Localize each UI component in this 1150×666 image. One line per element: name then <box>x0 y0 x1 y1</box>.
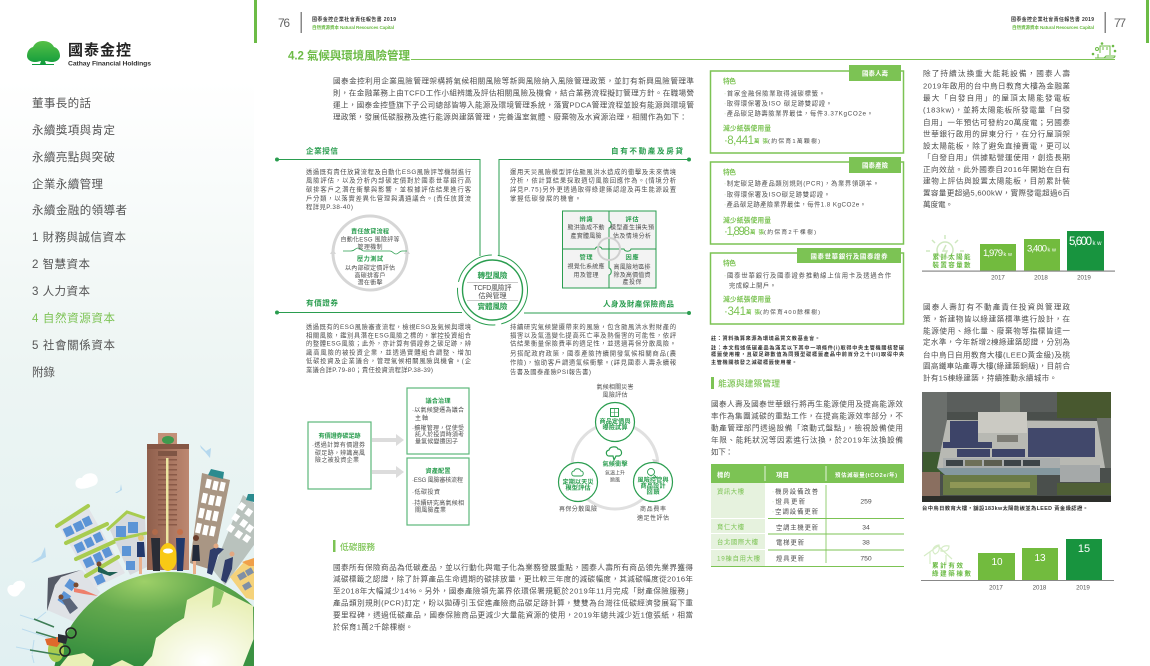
text: green building paragraph: 園高鐵車站產專大樓(綠建築銅級)，目前合 <box>923 360 1070 370</box>
table: equipment replacement <box>711 464 904 566</box>
panel: Cathay Century: ·制定碳足跡產品類別規則(PCR)，為業界領頭羊。 <box>724 178 879 188</box>
text: solar paragraph: 置容量更超過5,600kW，實際發電超過6百 <box>923 188 1070 198</box>
box: asset allocation <box>407 458 469 525</box>
text: solar paragraph: 2019年啟用的台中烏日教育大樓為金融業 <box>923 80 1070 90</box>
heading: life and property insurance: 人身及財產保險商品 <box>603 298 674 308</box>
text: low carbon service: 國泰所有保險商品為低碳產品，並以行動化與電子化為業務發展重點，國泰人壽所有商品領先業界獲得 <box>333 562 693 572</box>
footnotes: 標籤使用權，且碳足跡數值為同類型碳標籤產品中前百分之十(ii)取得中央 <box>711 351 904 358</box>
text: securities: 的整體ESG風險；此外，亦計算有價證券之碳足跡，辨 <box>306 338 472 348</box>
puzzle diagram: 模型產生損失預 <box>610 224 654 232</box>
tower <box>147 433 189 570</box>
cycle diagram: climate impact: 風險評估 <box>602 391 628 399</box>
text: corporate lending: 戶分類，以落實差異化管理與溝通議合。(責任放貸流 <box>306 194 472 202</box>
section: low carbon service heading <box>333 540 375 552</box>
panel: Cathay Century: ·取得環保署及ISO碳足跡雙認證。 <box>724 190 830 198</box>
text: green building paragraph: 台中烏日自用教育大樓(LEED黃金級)及桃 <box>923 350 1070 360</box>
panel: Cathay United Bank and Securities: 特色 <box>723 258 736 268</box>
center circle: transition and physical risk: 估與管理 <box>478 291 506 300</box>
node: pricing <box>596 402 634 442</box>
circular diagram: responsible lending and stress test: 高碳排客戶 <box>354 272 386 280</box>
table: equipment replacement: 資訊大樓 <box>717 486 745 496</box>
table: equipment replacement: 19棟自用大樓 <box>717 554 761 562</box>
box: stewardship: 量氣候變遷因子 <box>415 438 458 446</box>
cycle diagram: climate impact: 再保分散風險 <box>559 505 597 513</box>
cycle diagram: climate impact: 商品費率 <box>640 505 666 513</box>
text: real estate: 掌握低碳發展的機會。 <box>510 194 581 202</box>
panel: Cathay United Bank and Securities: 萬張 <box>746 308 760 316</box>
text: solar paragraph: 建物上評估與設置太陽能板，目前累計裝 <box>923 176 1070 186</box>
center circle: transition and physical risk: 轉型風險 <box>478 270 508 280</box>
bar chart: cumulative green buildings: 15 <box>1078 543 1090 555</box>
footnotes: 註：資料換算來源為環境品質文教基金會。 <box>711 335 820 342</box>
logo: Cathay Financial Holdings: 國泰金控 <box>68 41 131 59</box>
bar chart: cumulative green buildings: 10 <box>991 557 1003 568</box>
box: asset allocation: 關風險產業 <box>415 506 446 514</box>
heading: real estate and mortgage: 自有不動產及房貸 <box>611 146 683 156</box>
box: securities footprint: 碳足跡，辨識高風 <box>315 449 365 457</box>
navigation menu: 4 自然資源資本 <box>32 311 116 325</box>
puzzle diagram: 視覺化系統應 <box>568 262 604 270</box>
table: equipment replacement: ·空調設備更新 <box>772 506 819 516</box>
flow diagram: securities carbon footprint <box>308 388 469 525</box>
page header right: 國泰金控企業社會責任報告書 2019 <box>1011 16 1094 23</box>
center circle: transition and physical risk <box>458 255 528 325</box>
text: solar paragraph: 「自發自用」供據點營運使用，創造長期 <box>923 152 1070 162</box>
puzzle diagram: 颱洪造成不動 <box>568 224 604 232</box>
panel: Cathay United Bank and Securities: 完成線上開戶。 <box>729 280 776 290</box>
bar chart: cumulative green buildings: 13 <box>1034 553 1046 564</box>
table: equipment replacement: 預估減碳量(tCO2e/年) <box>835 471 897 479</box>
bar chart: cumulative green buildings: 2017 <box>989 584 1003 592</box>
text: insurance products: 持續研究氣候變遷帶來的風險，包含颱風洪水對財產的 <box>510 322 676 331</box>
text: real estate: 運用天災風險模型評估颱風洪水造成的衝擊及未來情境 <box>510 167 676 176</box>
page edge tab right <box>1146 0 1149 43</box>
page header left: 國泰金控企業社會責任報告書 2019 <box>312 16 396 23</box>
circular diagram: responsible lending and stress test: 責任放貸流程 <box>351 228 389 236</box>
page edge tab left <box>254 0 257 43</box>
text: corporate lending: 風險評估，以及分析內部碳定價對於國泰世華銀行高 <box>306 176 471 184</box>
footnotes: 註：本文指述低碳產品為滿足以下其中一項條件(i)取得中央主管機關核發碳 <box>711 344 904 352</box>
text: green building paragraph: 計有15棟綠建築，持續推動永續城市。 <box>923 372 1057 382</box>
text: solar paragraph: 自用」一年預估可發約20萬度電；另國泰 <box>923 117 1070 127</box>
box: stewardship: 託人於投資時須考 <box>415 430 464 438</box>
box: securities footprint: 有價證券碳足跡 <box>318 432 361 440</box>
text: green building paragraph <box>923 302 1070 382</box>
text: solar paragraph: 除了持續汰換重大能耗設備，國泰人壽 <box>923 68 1070 78</box>
cycle diagram: climate impact <box>558 383 672 522</box>
node: risk control: 商品設計 <box>640 482 666 490</box>
intro paragraph <box>333 76 694 122</box>
box: securities footprint: ·透過計算有價證券 <box>312 441 365 449</box>
photo detail: roof and solar arrays <box>937 412 1105 482</box>
table: equipment replacement: ·機房設備改善 <box>772 486 818 496</box>
panel: Cathay United Bank and Securities: ·341 <box>724 306 746 318</box>
navigation menu: 3 人力資本 <box>32 284 90 298</box>
text: energy paragraph: 國泰人壽及國泰世華銀行將再生能源使用及提高能源效 <box>711 398 903 408</box>
navigation menu: 企業永續管理 <box>32 177 104 191</box>
bar chart: cumulative solar capacity <box>922 231 1115 282</box>
text: green building paragraph: 策，新建物皆以綠建築標準進行設計，在 <box>923 314 1070 324</box>
box: asset allocation: ·低碳投資 <box>412 488 440 496</box>
panel: Cathay United Bank and Securities: (約保育400餘棵樹) <box>760 308 820 316</box>
bar chart: cumulative green buildings: 綠建築棟數 <box>932 568 972 578</box>
center circle: transition and physical risk: TCFD風險評 <box>474 283 512 292</box>
puzzle diagram: 產投保 <box>622 278 642 286</box>
node: disaster modelling <box>558 462 598 502</box>
intro paragraph: 國泰金控利用企業風險管理架構將氣候相關風險等新興風險納入風險管理政策，並訂有新興風險管理準 <box>333 76 694 86</box>
panel: Cathay Century: 國泰產險 <box>862 160 889 170</box>
text: green building paragraph: 定水準，今年新增2棟綠建築認證，分別為 <box>923 336 1070 346</box>
small green-roof house <box>107 512 147 575</box>
bar chart: cumulative solar capacity: 2018 <box>1034 274 1048 282</box>
bar chart: cumulative solar capacity: kw <box>1092 241 1102 247</box>
table: equipment replacement: 電梯更新 <box>776 538 805 546</box>
diagram frame lines <box>276 158 690 314</box>
center: climate impact <box>602 447 628 484</box>
puzzle diagram: 估及情境分析 <box>613 232 651 240</box>
text: securities <box>306 322 472 374</box>
panel: Cathay United Bank and Securities: 減少紙張使用量 <box>723 294 771 304</box>
cyclists and bushes <box>30 619 76 662</box>
text: solar paragraph <box>923 68 1070 209</box>
text: corporate lending <box>306 167 472 211</box>
page header right <box>1011 12 1126 33</box>
navigation menu: 永續亮點與突破 <box>32 150 116 164</box>
page header left: 76 <box>278 16 290 30</box>
navigation menu: 2 智慧資本 <box>32 257 90 271</box>
panel: Cathay United Bank and Securities <box>710 248 904 324</box>
text: securities: 識高風險的被投資企業，並透過實體組合調整、增加 <box>306 348 471 356</box>
panel: Cathay Life: (約保育1萬顆樹) <box>768 137 820 145</box>
text: energy paragraph: 動產管理部門透過設備「滾動式盤點」，檢視設備使用 <box>711 422 903 432</box>
text: securities: 透過既有的ESG風險審查流程，檢視ESG及氣候與環境 <box>306 322 471 331</box>
panel: Cathay United Bank and Securities: 國泰世華銀行及國泰證券 <box>810 252 888 260</box>
box: asset allocation: ·持續研究高氣候相 <box>412 499 464 507</box>
text: green building paragraph: 能源使用、綠化量、廢棄物等指標皆達一 <box>923 326 1070 336</box>
text: low carbon service: 要里程碑，透過低碳產品，國泰保險商品更減少大量能資源的使用，2019年總共減少近1億張紙，相當 <box>333 610 693 620</box>
clouds and birds <box>7 445 211 597</box>
illustration: green earth with city <box>7 433 254 666</box>
text: solar paragraph: 萬度電。 <box>923 199 953 209</box>
puzzle diagram: 高風險地區排 <box>614 263 650 271</box>
panel: Cathay Century <box>710 157 904 244</box>
center: climate impact: 氣溫上升 <box>605 470 625 476</box>
heading: securities: 有價證券 <box>306 298 338 308</box>
bar chart: cumulative solar capacity: 1,979 <box>983 248 1003 259</box>
circular diagram: responsible lending and stress test: 潛在衝擊 <box>358 278 382 286</box>
navigation menu: 5 社會關係資本 <box>32 338 116 352</box>
panel: Cathay Life: ·取得環保署及ISO 碳足跡雙認證。 <box>724 98 832 108</box>
table: equipment replacement: 空調主機更新 <box>776 522 819 532</box>
node: disaster modelling: 定期以天災 <box>562 478 594 486</box>
text: energy paragraph: 如下： <box>711 446 733 456</box>
table: equipment replacement: 項目 <box>776 471 789 479</box>
puzzle diagram <box>562 211 656 288</box>
text: corporate lending: 程詳見P.38-40) <box>306 202 353 211</box>
box: stewardship: 主軸 <box>415 414 428 422</box>
node: pricing: 商品定價與 <box>600 418 630 426</box>
center: climate impact: 颱風 <box>610 476 620 484</box>
table: equipment replacement: 34 <box>862 524 870 532</box>
center: climate impact: 氣候衝擊 <box>602 460 628 468</box>
navigation menu: 董事長的話 <box>32 96 92 110</box>
panel: Cathay Century: 萬張 <box>750 228 764 236</box>
panel: Cathay Life: ·8,441 <box>724 135 754 147</box>
logo: Cathay Financial Holdings: Cathay Financial Holdings <box>68 60 151 68</box>
bar chart: cumulative solar capacity: 2019 <box>1077 274 1091 282</box>
panel: Cathay Life: 特色 <box>723 76 736 86</box>
text: insurance products: 另搭配政府政策，國泰產險持續開發氣候相關商品(農 <box>510 348 677 358</box>
text: low carbon service: 於保育1萬2千餘棵樹。 <box>333 622 413 632</box>
bar chart: cumulative green buildings <box>921 539 1114 592</box>
bar chart: cumulative green buildings: 累計有效 <box>932 560 964 570</box>
circular diagram: responsible lending and stress test: 管理機制 <box>358 243 382 251</box>
table: equipment replacement: 台北國際大樓 <box>717 537 759 546</box>
box: stewardship: 議合治理 <box>426 397 451 405</box>
circular diagram: responsible lending and stress test: 以內部碳定價評估 <box>345 264 395 272</box>
section: low carbon service heading: 低碳服務 <box>340 541 375 552</box>
icon: leaf house <box>924 545 952 564</box>
table: equipment replacement: 育仁大樓 <box>717 522 745 531</box>
gray house <box>47 570 100 623</box>
cycle diagram: climate impact: 適足性評估 <box>637 514 669 522</box>
cycle diagram: climate impact: 氣候相關災害 <box>596 383 634 391</box>
table: equipment replacement: 標的 <box>717 470 731 479</box>
page header right: 自然資源資本 Natural Resources Capital <box>1012 24 1094 31</box>
text: real estate <box>510 167 677 202</box>
globe <box>54 572 254 666</box>
text: solar paragraph: (183kw)，並將太陽能板所發電量「自發 <box>923 104 1070 114</box>
navigation menu <box>32 96 127 379</box>
bar chart: cumulative solar capacity: 5,600 <box>1069 236 1092 248</box>
green-roof apartment <box>57 506 125 588</box>
panel: Cathay United Bank and Securities: ·國泰世華銀行及國泰證券推動線上信用卡及透過合作 <box>724 270 892 280</box>
gray-green building <box>213 494 254 585</box>
text: securities: 相關風險，鑑別具潛在ESG風險之標的，掌控投資組合 <box>306 330 472 340</box>
text: energy paragraph: 年限、能耗狀況等因素進行汰換，於2019年汰換設備 <box>711 434 903 444</box>
text: securities: 業議合詳P.79-80；責任投資流程詳P.38-39) <box>306 365 433 374</box>
text: insurance products: 損害以及氣溫變化提高死亡率及熱傷害的可能性，依評 <box>510 330 677 340</box>
intro paragraph: 運上，國泰金控暨旗下子公司總部皆導入能源及環境管理系統，落實PDCA管理流程並設有能源與環境管 <box>333 100 694 110</box>
text: corporate lending: 碳排客戶之潛在衝擊與影響，並根據評估結果進行客 <box>306 184 472 194</box>
text: low carbon service: 至2018年大幅減少14%。另外，國泰產險領先業界依環保署規範於2019年11月完成「財產保險服務」 <box>333 586 693 596</box>
footnotes <box>711 335 904 366</box>
navigation menu: 永續金融的領導者 <box>32 203 127 217</box>
text: solar paragraph: 正向效益。此外國泰自2016年開始在自有 <box>923 164 1070 174</box>
text: low carbon service: 產品類別規則(PCR)訂定，盼以拋磚引玉促進產險商品碳足跡計算，雙雙為台灣往低碳經濟發展寫下重 <box>333 598 693 608</box>
puzzle diagram: 用及管理 <box>574 271 598 279</box>
node: risk control <box>634 462 672 502</box>
box: asset allocation: ·ESG 風險審核流程 <box>412 476 463 484</box>
text: insurance products <box>510 322 677 376</box>
panel: left sidebar <box>0 0 254 666</box>
text: real estate: 分析，依計算結果採取適切風險回應作為。(情境分析 <box>510 176 677 184</box>
intro paragraph: 理政策，發展低碳服務及進行能源與建築管理，完善溫室氣體、廢棄物及水資源治理，相關作為如下： <box>333 112 687 122</box>
circular diagram: responsible lending and stress test: 壓力測試 <box>357 255 384 263</box>
intro paragraph: 則，在金融業務上由TCFD工作小組辨識及評估相關風險及機會，結合業務流程擬訂管理方針。在職場營 <box>333 88 694 98</box>
table: equipment replacement: ·燈具更新 <box>772 496 806 506</box>
puzzle diagram: 產實體風險 <box>570 232 602 240</box>
panel: Cathay Life: ·產品碳足跡壽險業界最佳，每件3.37KgCO2e。 <box>724 108 873 118</box>
navigation menu: 永續獎項與肯定 <box>32 123 116 137</box>
box: asset allocation: 資產配置 <box>426 467 450 475</box>
panel: Cathay Life: ·首家金融保險業取得減碳標籤。 <box>724 88 825 98</box>
box: stewardship: ·以氣候變遷為議合 <box>412 406 464 414</box>
text: insurance products: 作險)，協助客戶調適氣候衝擊。(詳見國泰人壽永續報 <box>510 358 677 366</box>
box: securities footprint: 險之被投資企業 <box>315 456 359 464</box>
text: insurance products: 告書及國泰產險PSI報告書) <box>510 367 591 376</box>
bar chart: cumulative solar capacity: 2017 <box>991 274 1005 282</box>
navigation menu: 附錄 <box>32 365 56 379</box>
panel: Cathay Life <box>710 65 904 153</box>
bar chart: cumulative solar capacity: 累計太陽能 <box>932 252 971 261</box>
people and mascot <box>58 529 234 614</box>
icon: sun <box>926 235 964 258</box>
puzzle diagram: 除及高價值資 <box>614 271 650 279</box>
table: equipment replacement: 259 <box>860 498 872 506</box>
bar chart: cumulative solar capacity: kw <box>1048 248 1056 254</box>
text: green building paragraph: 國泰人壽訂有不動產責任投資與管理政 <box>923 302 1070 312</box>
text: energy paragraph <box>711 398 903 456</box>
photo: rooftop solar building <box>922 392 1111 502</box>
bar chart: cumulative green buildings: 2018 <box>1033 584 1047 592</box>
panel: Cathay Life: 國泰人壽 <box>862 68 889 78</box>
circular diagram: responsible lending and stress test: 自動化ESG 風險評等 <box>340 236 400 244</box>
text: insurance products: 估結果衡量保險費率的適足性，並透過再保分散風險。 <box>510 338 676 348</box>
windmills <box>16 612 52 663</box>
section heading 4.2: 4.2 氣候與環境風險管理 <box>288 48 410 62</box>
box: securities footprint <box>308 422 371 489</box>
bar chart: cumulative solar capacity: kw <box>1004 252 1012 258</box>
panel: Cathay Century: ·1,898 <box>724 226 750 238</box>
panel: Cathay Century: (約保育2千棵樹) <box>764 228 816 236</box>
section: energy and building heading: 能源與建築管理 <box>718 378 780 388</box>
box: stewardship: ·擴權管理，促使受 <box>412 424 464 432</box>
navigation menu: 1 財務與誠信資本 <box>32 230 126 244</box>
table: equipment replacement: 燈具更新 <box>776 554 805 562</box>
logo: Cathay Financial Holdings <box>27 41 151 68</box>
orange house <box>230 558 254 600</box>
puzzle diagram: 辨識 <box>580 216 592 224</box>
text: energy paragraph: 率作為集團減碳的重點工作，在提高能源效率部分，不 <box>711 410 903 420</box>
panel: Cathay Life: 萬張 <box>754 137 768 145</box>
text: low carbon service <box>333 562 693 632</box>
node: risk control: 風險控管與 <box>638 476 668 484</box>
panel: Cathay Century: ·產品碳足跡產險業界最佳，每件1.8 KgCO2e。 <box>724 200 866 208</box>
panel: Cathay Century: 特色 <box>723 168 736 176</box>
panel: Cathay Life: 減少紙張使用量 <box>723 124 771 132</box>
node: risk control: 回饋 <box>646 488 660 496</box>
node: pricing: 曝險試算 <box>602 424 628 432</box>
node: disaster modelling: 模型評估 <box>566 484 590 492</box>
page header left <box>278 12 396 33</box>
puzzle diagram: 評估 <box>626 216 638 224</box>
text: corporate lending: 透過既有責任放貸流程及自動化ESG風險評等機制進行 <box>306 167 472 176</box>
circular diagram: responsible lending and stress test <box>330 216 410 290</box>
bar chart: cumulative solar capacity: 裝置容量數 <box>932 260 971 269</box>
photo caption: 台中烏日教育大樓，舖設183kw太陽能板並為LEED 黃金級認證。 <box>922 504 1088 512</box>
bar chart: cumulative green buildings: 2019 <box>1076 584 1090 592</box>
tan solar building <box>190 469 230 570</box>
bar chart: cumulative solar capacity: 3,400 <box>1027 244 1047 254</box>
text: solar paragraph: 設太陽能板，除了避免直接賣電，更可以 <box>923 140 1070 150</box>
puzzle diagram: 因應 <box>626 254 638 262</box>
box: stewardship <box>407 388 469 454</box>
puzzle diagram: 管理 <box>580 254 593 262</box>
text: real estate: 詳見P.75)另外更透過取得綠建築認證及再生能源設置 <box>510 184 676 194</box>
text: solar paragraph: 最大「自發自用」的屋頂太陽能發電板 <box>923 92 1070 102</box>
page header right: 77 <box>1114 16 1126 30</box>
icon: green city <box>1092 43 1116 58</box>
text: securities: 低碳投資及企業議合，管理氣候相關風險與機會。(企 <box>306 356 472 365</box>
center circle: transition and physical risk: 實體風險 <box>478 301 508 311</box>
footnotes: 主管機關核發之減碳標籤使用權。 <box>711 359 797 366</box>
arrows <box>372 434 404 478</box>
table: equipment replacement: 38 <box>862 540 870 546</box>
page header left: 自然資源資本 Natural Resources Capital <box>312 24 394 31</box>
text: solar paragraph: 世華銀行啟用的屏東分行，在分行屋頂架 <box>923 128 1070 138</box>
heading: corporate lending: 企業授信 <box>306 146 338 156</box>
text: low carbon service: 減碳標籤之認證，除了計算產品生命週期的碳排放量，更比較三年度的減碳幅度，其減碳幅度從2016年 <box>333 574 693 584</box>
table: equipment replacement: 750 <box>860 556 872 562</box>
panel: Cathay Century: 減少紙張使用量 <box>723 216 771 224</box>
